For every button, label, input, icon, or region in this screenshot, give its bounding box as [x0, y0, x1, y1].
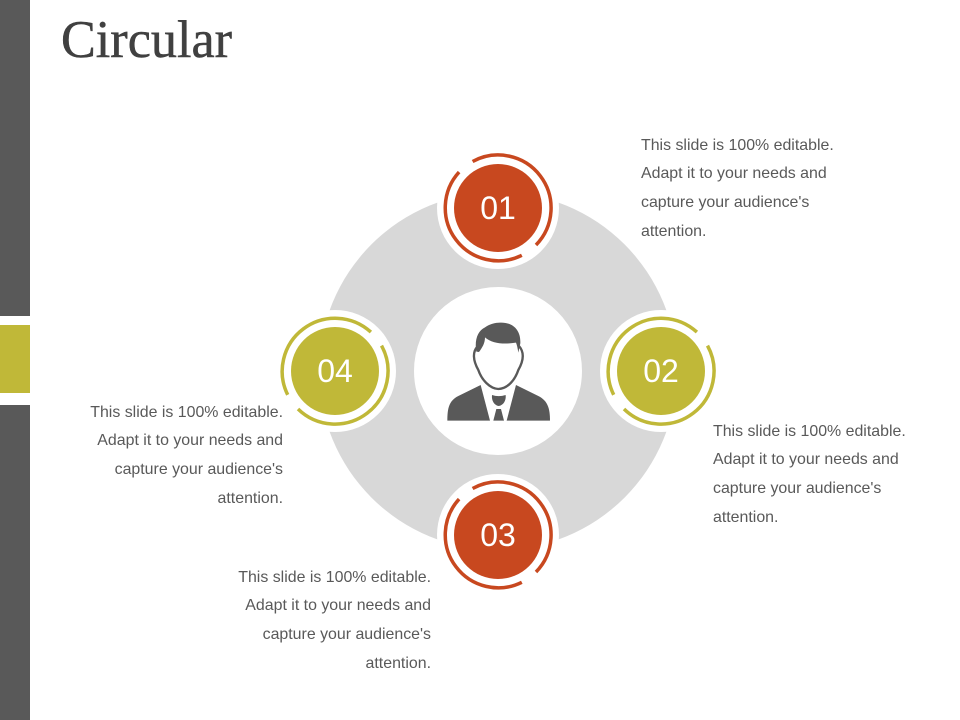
- text block 02: attention.: [713, 509, 778, 526]
- text block 03: capture your audience's: [263, 626, 431, 643]
- node 02: 02: [643, 353, 679, 389]
- text block 04: Adapt it to your needs and: [97, 432, 283, 449]
- text block 04: capture your audience's: [115, 461, 283, 478]
- text block 02: capture your audience's: [713, 480, 881, 497]
- title: Circular: [61, 11, 232, 69]
- text block 01: This slide is 100% editable.: [641, 137, 834, 154]
- node 01: 01: [480, 190, 516, 226]
- icon: businessman: [447, 323, 550, 421]
- donut ring: [319, 192, 677, 550]
- sidebar: [0, 0, 30, 720]
- node 04: 04: [317, 353, 353, 389]
- text block 02: Adapt it to your needs and: [713, 451, 899, 468]
- text block 04: [90, 404, 283, 507]
- node 04: [274, 310, 396, 432]
- text block 03: [238, 569, 431, 672]
- text block 02: This slide is 100% editable.: [713, 423, 906, 440]
- node 03: [437, 474, 559, 596]
- node 03: 03: [480, 517, 516, 553]
- text block 01: [641, 137, 834, 240]
- text block 01: Adapt it to your needs and: [641, 165, 827, 182]
- text block 02: [713, 423, 906, 526]
- text block 03: Adapt it to your needs and: [245, 597, 431, 614]
- node 02: [600, 310, 722, 432]
- text block 01: attention.: [641, 223, 706, 240]
- text block 04: This slide is 100% editable.: [90, 404, 283, 421]
- text block 03: This slide is 100% editable.: [238, 569, 431, 586]
- text block 03: attention.: [366, 655, 431, 672]
- text block 01: capture your audience's: [641, 194, 809, 211]
- node 01: [437, 147, 559, 269]
- text block 04: attention.: [218, 490, 283, 507]
